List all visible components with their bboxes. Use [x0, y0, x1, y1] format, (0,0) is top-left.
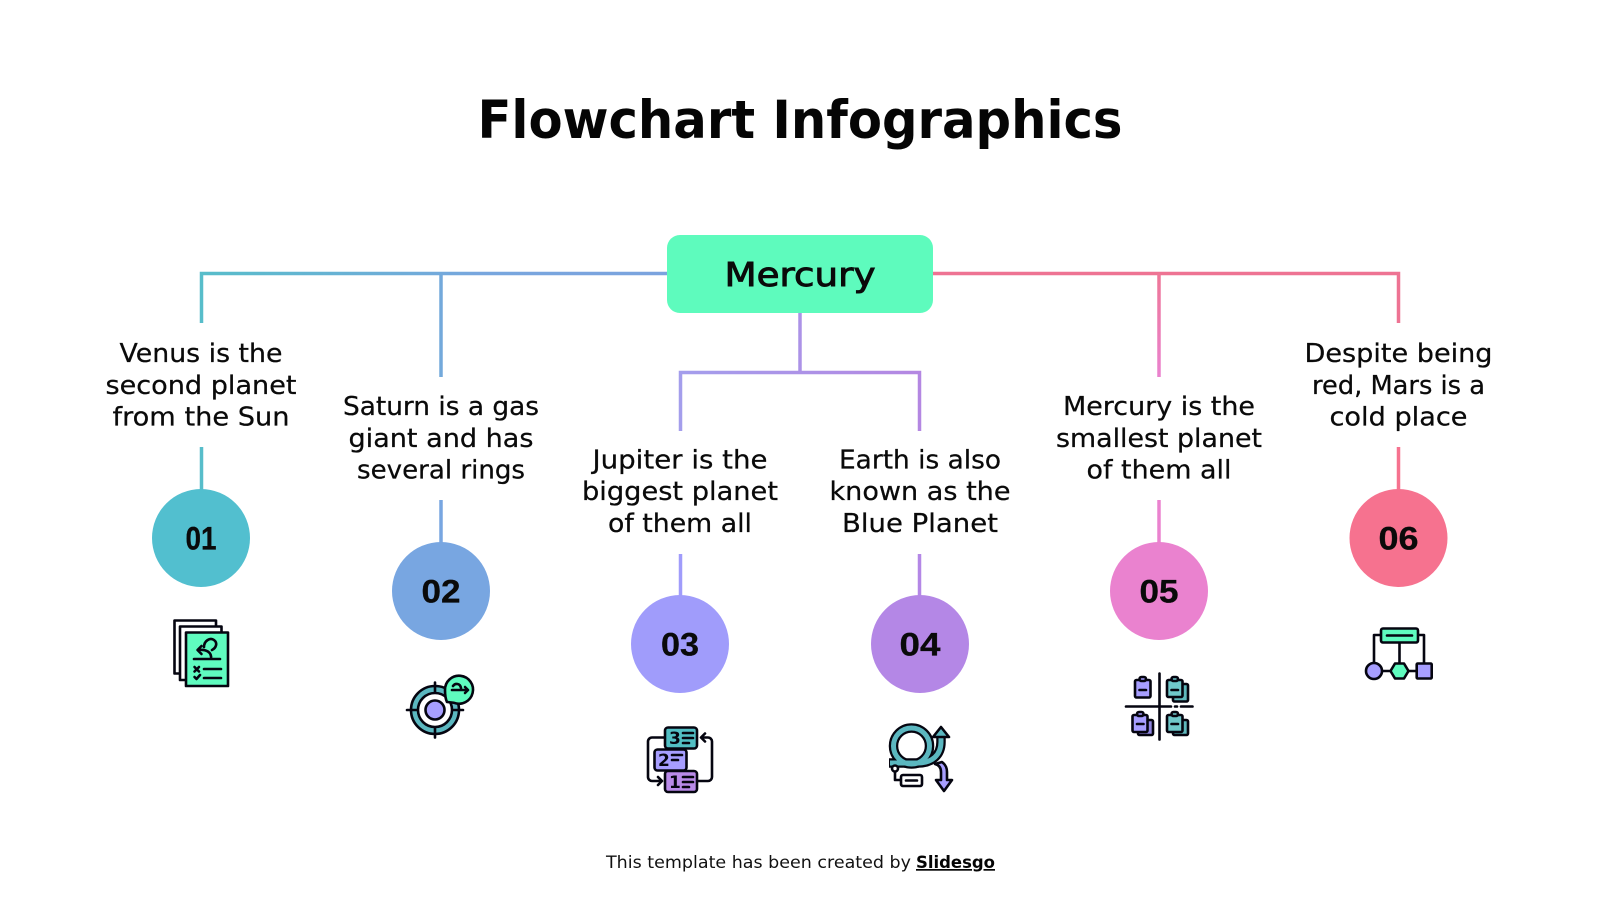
- icon: numbered cycle steps: 1: [669, 773, 681, 793]
- description 01: second planet: [106, 371, 296, 401]
- footer credit: This template has been created by: [605, 853, 911, 873]
- number badge 03: 03: [661, 626, 699, 662]
- description 04: Blue Planet: [842, 509, 998, 539]
- panel: column 05: [1056, 392, 1262, 740]
- icon: priority matrix of clipboards: [1126, 674, 1192, 740]
- number badge 04: 04: [900, 626, 941, 662]
- icon: mini flowchart: [1366, 628, 1432, 679]
- description 04: Earth is also: [839, 446, 1001, 476]
- description 03: [582, 446, 778, 539]
- icon: looping path with diverging arrows: [889, 727, 952, 791]
- connector: center branch to 03 and 04: [680, 313, 920, 431]
- description 01: from the Sun: [112, 402, 290, 432]
- connector stem 02: [439, 500, 443, 545]
- description 03: of them all: [608, 509, 752, 539]
- icon: numbered cycle steps: 3: [669, 729, 681, 749]
- central node: Mercury: [667, 235, 933, 313]
- description 03: Jupiter is the: [590, 446, 768, 476]
- description 05: [1056, 392, 1262, 486]
- connector stem 06: [1397, 447, 1400, 492]
- description 06: [1304, 339, 1492, 432]
- icon: numbered cycle steps: 2: [658, 751, 670, 771]
- number badge 06: 06: [1378, 520, 1418, 556]
- icon: stacked checklist pages: [174, 620, 228, 686]
- panel: column 01: [106, 339, 296, 686]
- description 05: smallest planet: [1056, 424, 1262, 454]
- description 04: [830, 446, 1010, 539]
- number badge 05: 05: [1140, 574, 1178, 610]
- description 05: Mercury is the: [1063, 392, 1255, 422]
- connector stem 04: [918, 554, 921, 598]
- description 04: known as the: [830, 477, 1010, 507]
- icon: numbered cycle steps: [648, 728, 712, 793]
- connector stem 05: [1157, 500, 1161, 545]
- number badge 03: [631, 595, 729, 693]
- description 02: several rings: [357, 456, 525, 486]
- connector stem 01: [200, 447, 203, 492]
- description 02: [343, 392, 539, 486]
- description 02: Saturn is a gas: [343, 392, 539, 422]
- connector: right branch to 05 and 06: [933, 274, 1398, 377]
- description 05: of them all: [1086, 456, 1232, 486]
- number badge 02: 02: [422, 574, 460, 610]
- connector stem 03: [679, 554, 682, 598]
- number badge 01: [152, 489, 250, 587]
- description 03: biggest planet: [582, 477, 778, 507]
- panel: column 06: [1304, 339, 1492, 679]
- description 06: red, Mars is a: [1312, 371, 1485, 401]
- number badge 04: [871, 595, 969, 693]
- icon: target with speech bubble: [407, 676, 473, 738]
- connector: left branch to 01 and 02: [202, 274, 667, 377]
- description 02: giant and has: [348, 424, 534, 454]
- number badge 01: 01: [186, 520, 216, 556]
- title: Flowchart Infographics: [478, 90, 1122, 151]
- number badge 05: [1110, 542, 1208, 640]
- central node: Mercury: Mercury: [724, 255, 876, 294]
- number badge 02: [392, 542, 490, 640]
- description 06: Despite being: [1304, 339, 1492, 369]
- description 01: Venus is the: [120, 339, 282, 369]
- panel: column 02: [343, 392, 539, 738]
- description 06: cold place: [1330, 402, 1468, 432]
- panel: column 04: [830, 446, 1010, 791]
- panel: column 03: [582, 446, 778, 793]
- number badge 06: [1350, 489, 1448, 587]
- description 01: [106, 339, 296, 432]
- footer credit: Slidesgo: [916, 853, 995, 873]
